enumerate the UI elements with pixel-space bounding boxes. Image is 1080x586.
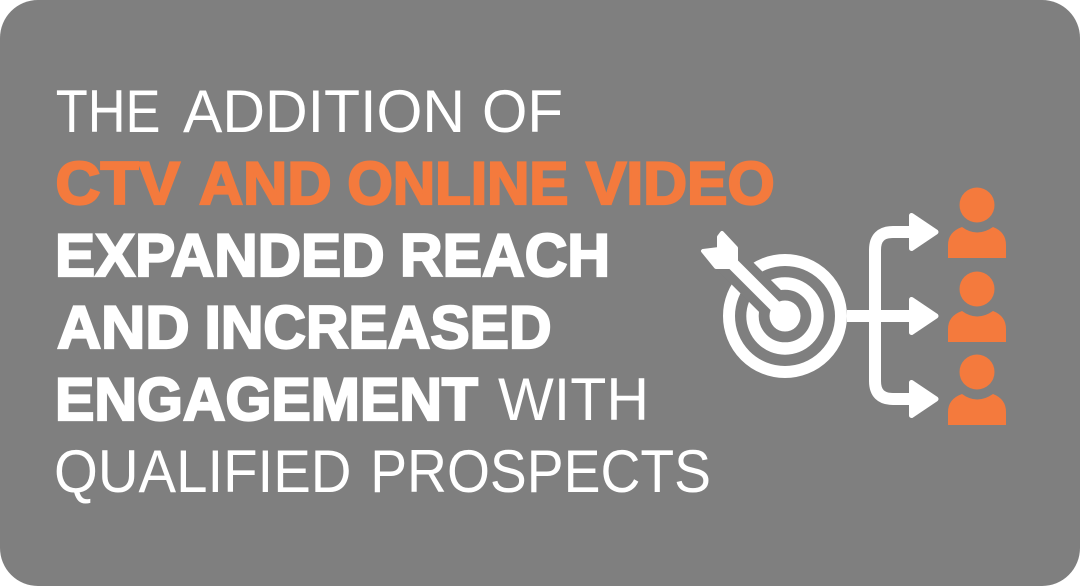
heading text block <box>54 78 775 505</box>
heading line 3: EXPANDED <box>55 222 384 289</box>
heading line 5: WITH <box>498 366 649 433</box>
icon: branching arrows <box>847 216 936 416</box>
heading line 1: THE <box>56 78 161 145</box>
heading line 3: REACH <box>400 222 610 289</box>
heading line 4: INCREASED <box>204 294 552 361</box>
heading line 5: ENGAGEMENT <box>55 366 478 433</box>
heading line 6 <box>54 438 711 505</box>
heading line 6: QUALIFIED <box>54 438 352 505</box>
heading line 2: orange highlight: VIDEO <box>586 150 775 217</box>
heading line 1 <box>56 78 563 145</box>
person 1 <box>948 188 1006 258</box>
heading line 4: AND <box>57 294 190 361</box>
heading line 1: OF <box>482 78 563 145</box>
heading line 4 <box>57 294 552 361</box>
icon: target with arrow <box>703 233 841 372</box>
heading line 3 <box>55 222 610 289</box>
icon: three people <box>948 188 1006 425</box>
person 2 <box>948 272 1006 342</box>
heading line 1: ADDITION <box>183 78 465 145</box>
person 3 <box>948 354 1006 425</box>
heading line 2: orange highlight: CTV <box>56 150 180 217</box>
heading line 2: orange highlight: ONLINE <box>347 150 568 217</box>
heading line 2: orange highlight <box>56 150 775 217</box>
heading line 2: orange highlight: AND <box>199 150 332 217</box>
heading line 6: PROSPECTS <box>370 438 711 505</box>
